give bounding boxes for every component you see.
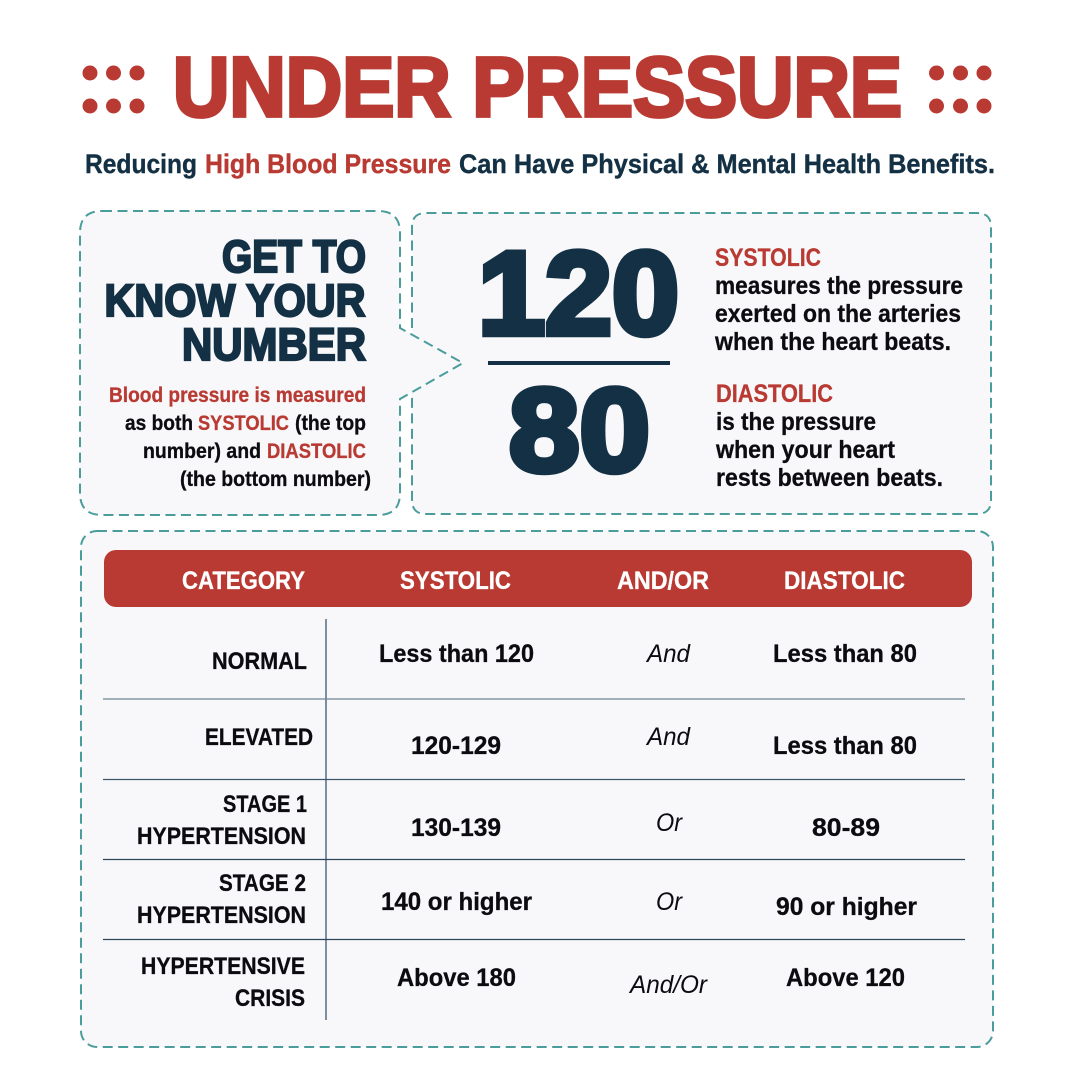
explanatory text: DIASTOLIC	[267, 440, 366, 463]
subtitle	[85, 149, 995, 179]
subtitle: High Blood Pressure	[205, 149, 451, 179]
diastolic definition	[715, 380, 943, 492]
row: stage 2 hypertension	[137, 870, 917, 929]
row: stage 2 hypertension: Or	[656, 888, 684, 916]
row: normal: And	[645, 640, 691, 668]
title: UNDER PRESSURE	[173, 40, 902, 134]
row: normal	[212, 640, 917, 675]
explanatory text: number) and	[143, 440, 261, 463]
row: elevated: 120-129	[411, 732, 501, 760]
row: stage 1 hypertension: 80-89	[812, 814, 880, 842]
row: normal: NORMAL	[212, 648, 307, 675]
table header: SYSTOLIC	[400, 567, 511, 595]
row: stage 1 hypertension: STAGE 1	[223, 791, 307, 818]
explanatory text: SYSTOLIC	[198, 412, 289, 435]
row: stage 2 hypertension: HYPERTENSION	[137, 902, 306, 929]
heading: NUMBER	[182, 319, 366, 370]
explanatory text: (the top	[295, 412, 366, 435]
heading: KNOW YOUR	[104, 275, 366, 326]
row: stage 2 hypertension: 90 or higher	[776, 893, 917, 921]
row: stage 1 hypertension: 130-139	[411, 814, 501, 842]
row: hypertensive crisis: Above 180	[397, 964, 516, 992]
title banner	[82, 40, 992, 134]
panel: blood pressure categories table	[81, 531, 993, 1047]
row: stage 1 hypertension: HYPERTENSION	[137, 823, 306, 850]
table header	[104, 550, 972, 607]
diastolic definition: when your heart	[715, 436, 896, 464]
heading	[104, 231, 366, 370]
systolic definition: measures the pressure	[715, 272, 963, 300]
icon: left dot grid	[82, 66, 144, 114]
systolic definition	[714, 244, 963, 356]
row: hypertensive crisis: CRISIS	[235, 985, 305, 1012]
explanatory text: Blood pressure is measured	[109, 384, 366, 407]
row: hypertensive crisis: HYPERTENSIVE	[141, 953, 305, 980]
explanatory text: (the bottom number)	[180, 468, 371, 491]
row: elevated: Less than 80	[773, 732, 917, 760]
subtitle: Can Have Physical & Mental Health Benefits.	[459, 149, 995, 179]
subtitle: Reducing	[85, 149, 197, 179]
explanatory text: as both	[125, 412, 193, 435]
diastolic definition: is the pressure	[716, 408, 876, 436]
icon: right dot grid	[929, 66, 992, 114]
row: stage 1 hypertension: Or	[656, 809, 684, 837]
systolic definition: when the heart beats.	[714, 328, 951, 356]
systolic definition: SYSTOLIC	[715, 244, 821, 272]
row: elevated	[205, 723, 917, 760]
big number 80: 80	[509, 365, 650, 497]
panel: get to know your number	[80, 211, 463, 515]
explanatory text	[109, 384, 371, 491]
fraction line	[488, 361, 670, 365]
row: stage 1 hypertension	[137, 791, 880, 850]
row: hypertensive crisis: Above 120	[786, 964, 905, 992]
row: elevated: And	[645, 723, 691, 751]
table header: CATEGORY	[182, 567, 305, 595]
big number 120: 120	[478, 228, 679, 360]
row: stage 2 hypertension: STAGE 2	[219, 870, 306, 897]
row: normal: Less than 80	[773, 640, 917, 668]
diastolic definition: rests between beats.	[716, 464, 943, 492]
systolic definition: exerted on the arteries	[715, 300, 961, 328]
heading: GET TO	[222, 231, 366, 282]
table header: DIASTOLIC	[784, 567, 905, 595]
row: elevated: ELEVATED	[205, 724, 313, 751]
table header: AND/OR	[617, 567, 709, 595]
row: normal: Less than 120	[379, 640, 534, 668]
row: hypertensive crisis: And/Or	[628, 971, 709, 999]
row: hypertensive crisis	[141, 953, 905, 1012]
panel: blood pressure reading	[412, 213, 991, 514]
diastolic definition: DIASTOLIC	[716, 380, 833, 408]
row: stage 2 hypertension: 140 or higher	[381, 888, 532, 916]
